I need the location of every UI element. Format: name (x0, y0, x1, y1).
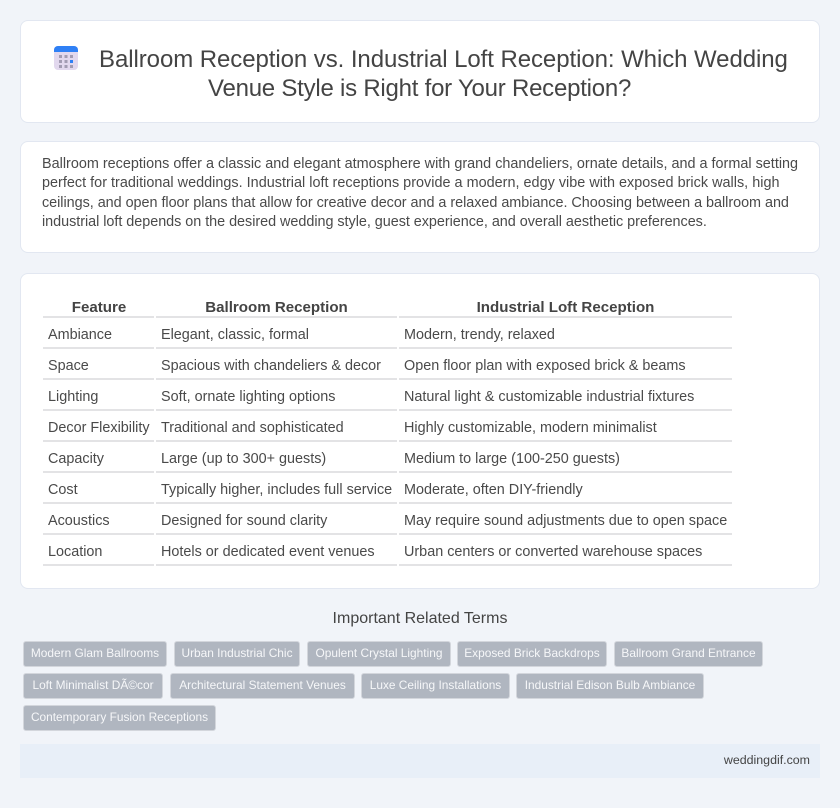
table: comparison: Hotels or dedicated event venues (161, 544, 375, 560)
table: comparison (43, 299, 732, 566)
panel: intro (20, 141, 820, 253)
table: comparison: Feature (72, 299, 126, 316)
table: comparison: Ballroom Reception (205, 299, 348, 316)
title (99, 46, 788, 102)
text block: intro paragraph (42, 156, 798, 230)
table: comparison: Highly customizable, modern minimalist (404, 420, 657, 436)
tags: related terms: Industrial Edison Bulb Ambiance (525, 678, 695, 692)
tags: related terms (23, 641, 763, 731)
title: Venue Style is Right for Your Reception? (208, 75, 631, 102)
icon: calendar (54, 46, 78, 70)
table: comparison: Decor Flexibility (48, 420, 150, 436)
table: comparison: Lighting (48, 389, 98, 405)
table: comparison: Large (up to 300+ guests) (161, 451, 326, 467)
text block: intro paragraph: ceilings, and open floor plans that allow for creative decor and a relaxed ambiance. Choosing between a ballroom and (42, 195, 789, 211)
table: comparison: Medium to large (100-250 guests) (404, 451, 620, 467)
table: comparison: Moderate, often DIY-friendly (404, 482, 583, 498)
table: comparison: Space (48, 358, 89, 374)
tags: related terms: Contemporary Fusion Receptions (31, 710, 208, 724)
table: comparison: Soft, ornate lighting options (161, 389, 335, 405)
table: comparison: Cost (48, 482, 78, 498)
text block: intro paragraph: perfect for traditional weddings. Industrial loft receptions provide a modern, edgy vibe with exposed brick walls, high (42, 175, 780, 191)
table: comparison: Natural light & customizable industrial fixtures (404, 389, 694, 405)
table: comparison: Acoustics (48, 513, 110, 529)
table: comparison: Location (48, 544, 102, 560)
text block: intro paragraph: industrial loft depends on the desired wedding style, guest experience, and overall aesthetic preferences. (42, 214, 707, 230)
footer bar (20, 744, 820, 778)
title: Ballroom Reception vs. Industrial Loft Reception: Which Wedding (99, 46, 788, 73)
heading: related terms: Important Related Terms (333, 610, 507, 627)
tags: related terms: Luxe Ceiling Installations (370, 678, 501, 692)
table: comparison: Elegant, classic, formal (161, 327, 309, 343)
tags: related terms: Exposed Brick Backdrops (464, 646, 600, 660)
tags: related terms: Architectural Statement Venues (179, 678, 346, 692)
text block: intro paragraph: Ballroom receptions offer a classic and elegant atmosphere with grand chandeliers, ornate details, and a formal setting (42, 156, 798, 172)
table: comparison: May require sound adjustments due to open space (404, 513, 727, 529)
tags: related terms: Ballroom Grand Entrance (621, 646, 756, 660)
table: comparison: Typically higher, includes full service (161, 482, 392, 498)
footer text: weddingdif.com (724, 753, 810, 767)
table: comparison: Open floor plan with exposed brick & beams (404, 358, 686, 374)
table: comparison: Urban centers or converted warehouse spaces (404, 544, 702, 560)
table: comparison: Capacity (48, 451, 104, 467)
tags: related terms: Loft Minimalist DÃ©cor (32, 678, 154, 692)
table: comparison: Traditional and sophisticated (161, 420, 344, 436)
tags: related terms: Opulent Crystal Lighting (316, 646, 442, 660)
tags: related terms: Modern Glam Ballrooms (31, 646, 159, 660)
tags: related terms: Urban Industrial Chic (181, 646, 293, 660)
panel: header (20, 20, 820, 123)
table: comparison: Ambiance (48, 327, 112, 343)
panel: comparison table (20, 273, 820, 589)
table: comparison: Designed for sound clarity (161, 513, 327, 529)
table: comparison: Spacious with chandeliers & decor (161, 358, 381, 374)
table: comparison: Industrial Loft Reception (477, 299, 654, 316)
table: comparison: Modern, trendy, relaxed (404, 327, 555, 343)
